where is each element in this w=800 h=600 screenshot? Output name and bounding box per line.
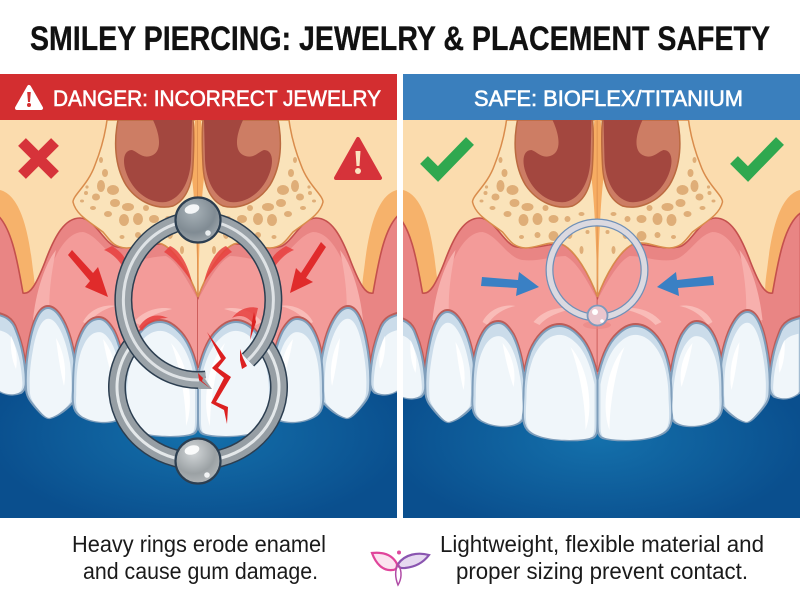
icon: header warning triangle [17, 87, 41, 108]
tooth crack [207, 332, 231, 424]
side tissue [403, 190, 800, 292]
icon: butterfly logo [372, 550, 429, 585]
clear ball [588, 306, 608, 326]
bottom metal ball [176, 438, 220, 484]
blue header bar [403, 74, 800, 120]
blue background below the teeth [0, 378, 397, 518]
red chip at ring tip [198, 373, 211, 389]
gums and bone anatomy [394, 120, 800, 380]
skin background [403, 120, 800, 290]
arrow: right pressure [290, 242, 326, 293]
flexible clear ring [550, 222, 644, 318]
caption: safe: proper sizing prevent contact. [456, 558, 748, 584]
arrow: left gentle [481, 272, 539, 296]
icon: left green check [424, 141, 470, 174]
soft gum shadow [583, 322, 611, 329]
teeth [394, 311, 800, 440]
panel: danger, incorrect jewelry [0, 74, 401, 518]
icon: warning triangle [336, 139, 380, 178]
panel: safe, bioflex or titanium [394, 74, 800, 518]
safe heading: SAFE: BIOFLEX/TITANIUM [474, 86, 743, 111]
top metal ball [176, 198, 220, 242]
inflamed gum patches [104, 246, 294, 331]
ring tip [198, 372, 212, 389]
danger heading: DANGER: INCORRECT JEWELRY [53, 86, 381, 111]
side tissue [0, 190, 397, 292]
blue background below the teeth [403, 394, 800, 518]
skin background [0, 120, 397, 285]
icon: red cross [22, 142, 55, 175]
lower heavy ring [117, 343, 279, 461]
caption: safe [440, 531, 764, 584]
arrow: left pressure [68, 250, 108, 297]
caption: danger [72, 531, 326, 584]
caption: danger: Heavy rings erode enamel [72, 531, 326, 557]
gums and bone anatomy [0, 120, 401, 380]
icon: right green check [734, 141, 780, 174]
arrow: right gentle [657, 272, 714, 296]
caption: danger: and cause gum damage. [83, 558, 318, 584]
teeth [0, 307, 401, 436]
caption: safe: Lightweight, flexible material and [440, 531, 764, 557]
crack near ring tip [240, 312, 256, 369]
upper heavy ring [123, 220, 273, 380]
red header bar [0, 74, 397, 120]
